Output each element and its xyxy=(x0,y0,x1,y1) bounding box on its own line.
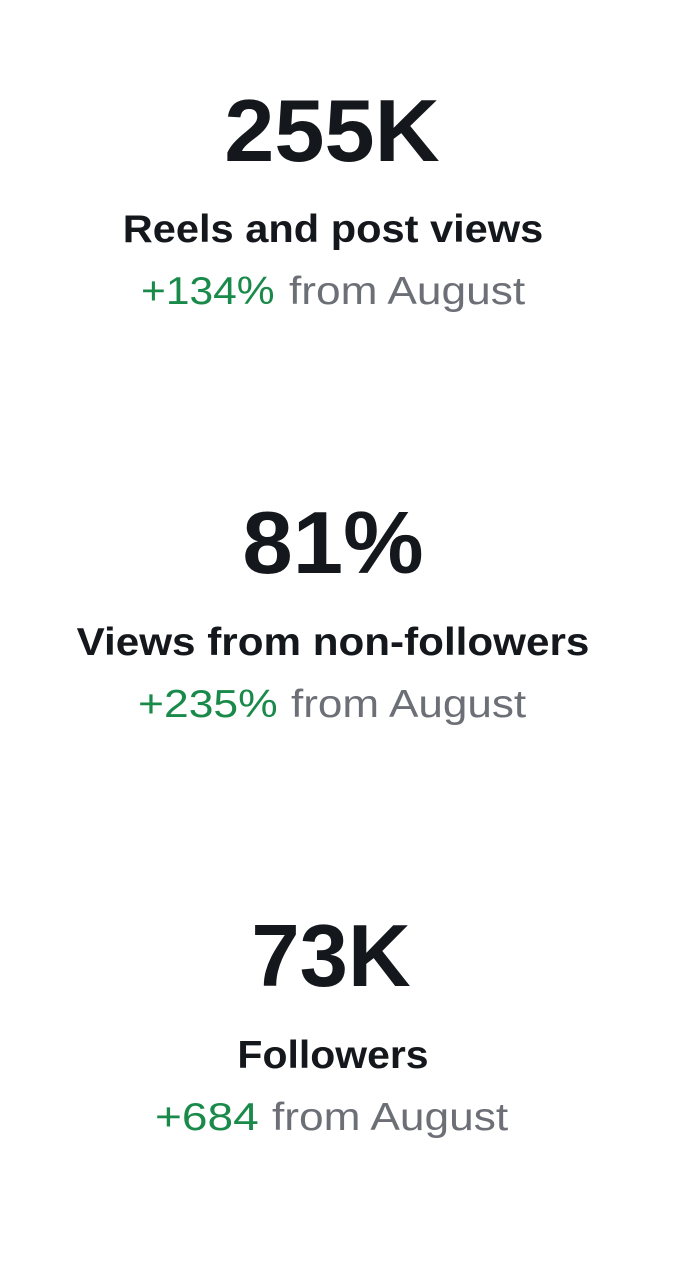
big number: 81%: 81% xyxy=(242,493,423,592)
change: +134% from August xyxy=(141,270,525,313)
change: +134% from August: from August xyxy=(288,270,525,313)
change: +684 from August: +684 xyxy=(155,1096,259,1139)
big number: 73K: 73K xyxy=(251,906,411,1005)
stat block: views from non-followers xyxy=(77,493,589,726)
change: +235% from August xyxy=(138,683,526,726)
change: +235% from August: from August xyxy=(290,683,526,726)
label: followers: Followers xyxy=(237,1034,429,1077)
change: +684 from August xyxy=(155,1096,508,1139)
change: +684 from August: from August xyxy=(272,1096,508,1139)
label: reels and post views: Reels and post views xyxy=(123,208,543,251)
big number: 255K: 255K xyxy=(224,81,439,180)
change: +134% from August: +134% xyxy=(141,270,275,313)
change: +235% from August: +235% xyxy=(138,683,278,726)
label: views from non-followers: Views from non-followers xyxy=(77,621,589,664)
stat block: reels and post views xyxy=(123,81,543,313)
stat block: followers xyxy=(155,906,508,1139)
